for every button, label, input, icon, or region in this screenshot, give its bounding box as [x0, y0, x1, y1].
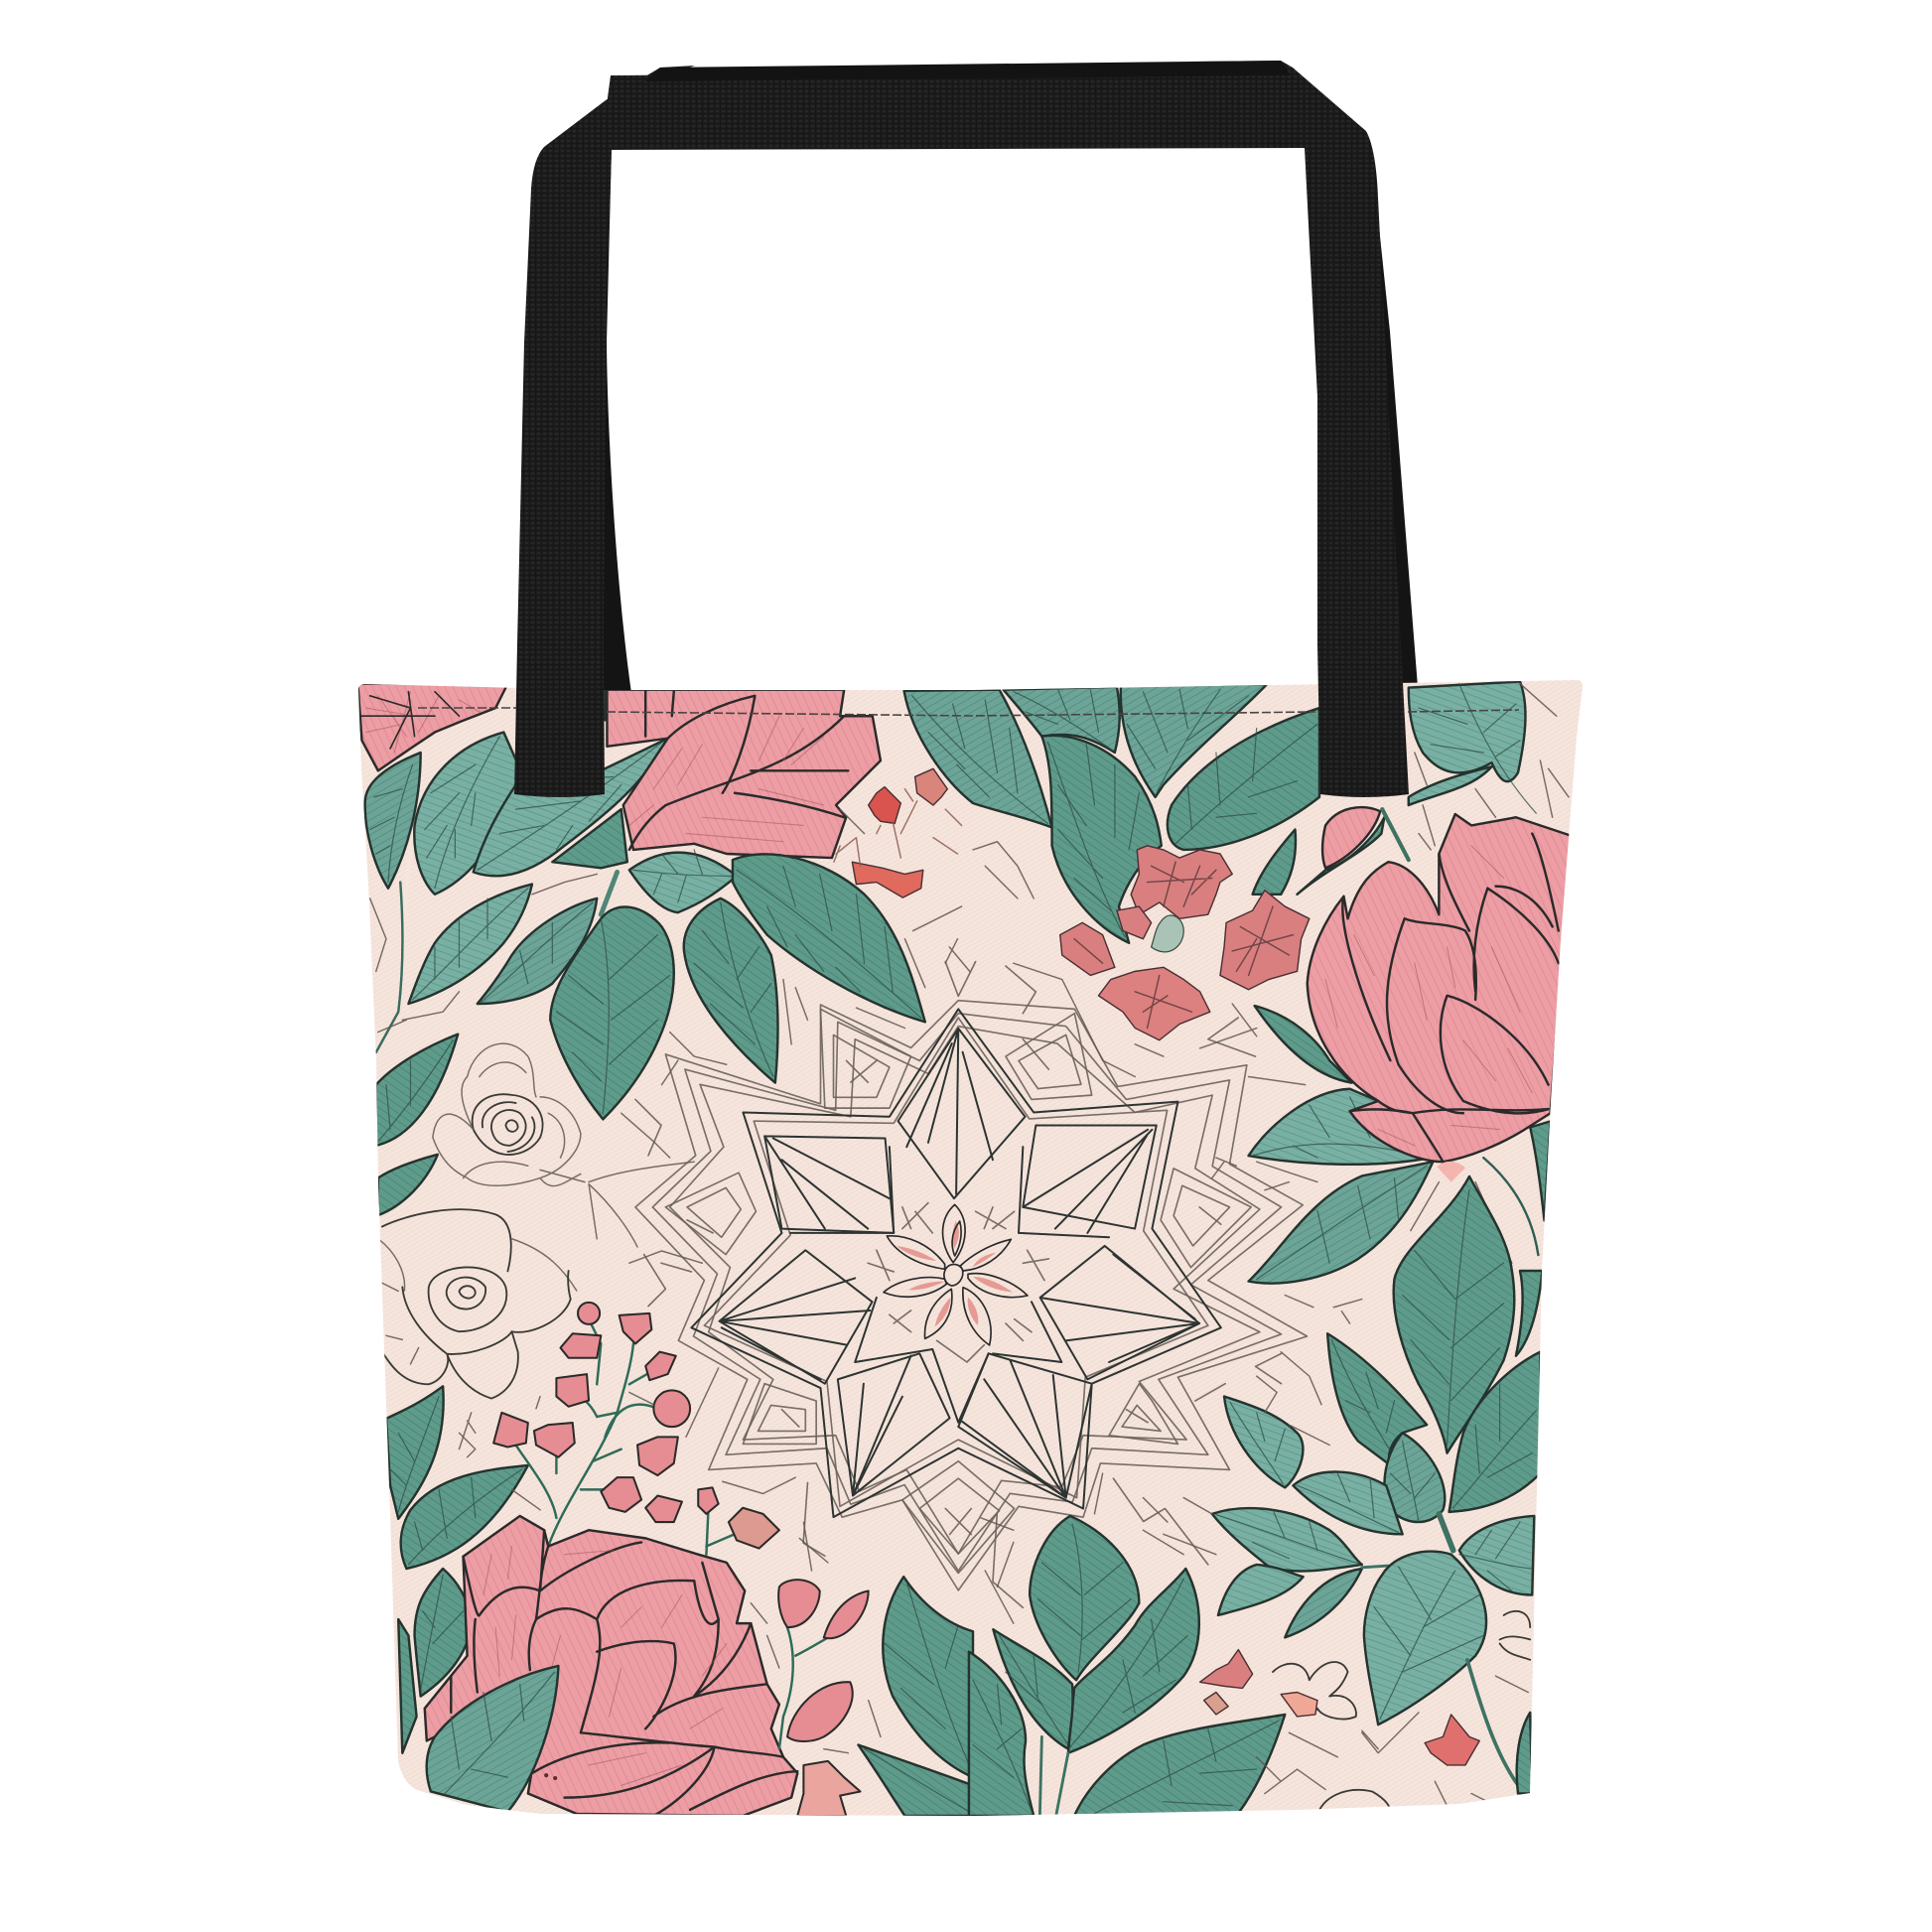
leaf right of centre	[1068, 1569, 1199, 1753]
stems bottom	[1039, 1736, 1068, 1816]
stem diagonal	[1467, 1660, 1526, 1796]
line flower	[1273, 1662, 1356, 1719]
stem down left	[376, 883, 402, 1052]
leaf lower left	[376, 1035, 458, 1146]
centre-bottom leaf top	[1030, 1516, 1139, 1680]
leaf edge lower	[415, 1569, 472, 1697]
quadrant: lower right	[969, 1176, 1542, 1816]
leaf centre large	[550, 906, 674, 1119]
top edge	[645, 61, 1291, 81]
quadrant: top left	[357, 684, 970, 1291]
main star outline	[691, 1009, 1221, 1517]
flower cluster	[1060, 846, 1310, 1040]
teal sliver	[604, 690, 606, 722]
stitching line	[418, 708, 1519, 716]
bag fabric	[338, 655, 1608, 1847]
big round leaf right	[1364, 1552, 1486, 1725]
sketch marks	[973, 684, 1569, 1263]
leaf far left	[398, 1619, 417, 1753]
bottom large leaf	[1074, 1715, 1285, 1816]
leaf left of centre	[993, 1629, 1073, 1749]
large pink flower	[607, 690, 881, 858]
leaf far left bottom	[969, 1652, 1034, 1816]
tiny pink flower left	[1200, 1650, 1253, 1715]
leaf tall	[414, 733, 520, 895]
small stem leaf	[1409, 766, 1491, 805]
leaf top right	[1409, 682, 1536, 813]
leaf left lower	[1218, 1565, 1304, 1615]
big leaf upper	[1394, 1176, 1514, 1453]
stem left	[402, 753, 423, 971]
stem above centre leaves	[601, 872, 618, 914]
leaf mid left	[408, 885, 532, 1004]
central star mandala	[635, 962, 1308, 1607]
line rose upper	[433, 1043, 694, 1247]
leaf edge upper	[386, 1386, 444, 1519]
leaf small lower	[1285, 1566, 1455, 1637]
front handle	[514, 61, 1409, 797]
line rose lower top	[378, 1209, 702, 1291]
left strap	[514, 66, 695, 797]
leaf top centre right	[1121, 684, 1267, 797]
leaf behind bud	[1253, 830, 1296, 895]
small teal leaf	[552, 809, 627, 868]
carnation flower top left	[357, 684, 507, 770]
leaf left edge	[365, 753, 421, 889]
stem	[1439, 1514, 1453, 1551]
sketch marks	[370, 809, 970, 1158]
outer sketched chevrons	[635, 962, 1308, 1607]
leaf centre left	[478, 898, 597, 1004]
leaf long under handle	[474, 739, 668, 876]
leaf centre-right	[1327, 1333, 1427, 1465]
small red flower sprig	[834, 768, 962, 897]
leaf lower middle	[684, 898, 777, 1083]
berry stems	[516, 1319, 735, 1555]
round leaf	[1385, 1433, 1445, 1522]
fabric twill	[1403, 683, 1412, 684]
leaf large centre	[1041, 736, 1162, 943]
quadrant: lower left	[382, 1267, 973, 1816]
leaf over peony	[427, 1666, 558, 1812]
right strap	[1191, 61, 1409, 797]
strip leaf right edge	[1516, 1271, 1542, 1356]
leaf top centre left	[1004, 687, 1120, 753]
rose bud	[1298, 807, 1409, 895]
leaf bottom	[858, 1745, 973, 1816]
quadrant: top right	[904, 682, 1571, 1284]
tote bag body	[338, 655, 1608, 1847]
line rose	[382, 1267, 571, 1449]
leaf under peony	[1255, 1006, 1352, 1083]
right edge leaves	[1483, 1121, 1551, 1255]
leaf upper left of cluster	[904, 690, 1052, 827]
leaf lowest left	[378, 1155, 438, 1215]
leaf big right	[733, 854, 925, 1022]
leaf long	[1212, 1508, 1362, 1572]
leaf right of cluster	[1168, 708, 1319, 850]
leaf centre bottom left	[883, 1577, 973, 1777]
pink berry buds	[493, 1303, 779, 1549]
right leaf	[1449, 1352, 1540, 1512]
leaf right small	[1459, 1516, 1534, 1595]
large peony	[1308, 814, 1571, 1182]
leaf edge middle	[401, 1465, 528, 1569]
line flower bottom right	[1317, 1611, 1530, 1816]
tiny pink flower right	[1425, 1715, 1479, 1765]
back handle	[596, 69, 1418, 693]
small left leaf	[1224, 1397, 1303, 1487]
pink peony lower left	[425, 1516, 797, 1816]
peony leaf upper	[1249, 1089, 1431, 1165]
middle leaf	[629, 850, 737, 912]
sketch marks	[459, 1368, 881, 1753]
leaf mid	[1293, 1472, 1403, 1534]
central flower	[884, 1204, 1028, 1345]
small leaf corner	[1517, 1713, 1532, 1794]
bud group right	[778, 1580, 869, 1816]
star second band	[704, 1018, 1208, 1506]
peony leaf lower	[1249, 1162, 1433, 1284]
sketch marks	[981, 1295, 1528, 1806]
star inner rays	[720, 1029, 1199, 1498]
